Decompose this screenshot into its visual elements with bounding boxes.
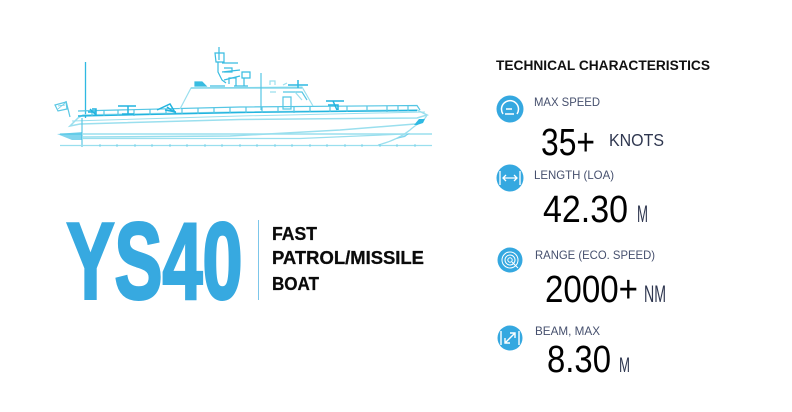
subtitle: FAST: [272, 223, 318, 244]
illustration: ship line drawing: [55, 47, 432, 147]
spec: length: [496, 164, 648, 231]
ship superstructure: [180, 73, 313, 110]
subtitle: PATROL/MISSILE: [272, 247, 424, 268]
icon: length arrows: [496, 164, 524, 192]
title: YS40: YS40: [66, 200, 242, 322]
ship radar tower: [195, 47, 250, 86]
value: 42.30: 42.30: [543, 189, 628, 231]
value: 2000+: 2000+: [545, 269, 638, 311]
unit: knots: KNOTS: [609, 130, 664, 150]
ship flag: [55, 101, 70, 117]
ship filled details: [57, 119, 425, 140]
subtitle: BOAT: [272, 273, 320, 294]
unit: m: M: [637, 201, 648, 228]
label: length: LENGTH (LOA): [534, 168, 614, 182]
ship deck railing: [78, 106, 420, 116]
ship deck guns: [88, 101, 344, 115]
unit: m: M: [619, 354, 630, 377]
heading: technical characteristics: TECHNICAL CHARACTERISTICS: [496, 58, 710, 73]
subtitle: [272, 223, 424, 294]
value: 8.30: 8.30: [547, 339, 611, 381]
value: 35+: 35+: [541, 122, 595, 164]
label: max speed: MAX SPEED: [534, 95, 600, 109]
icon: beam arrows: [498, 326, 522, 350]
spec: max speed: [496, 95, 664, 164]
label: beam: BEAM, MAX: [535, 324, 600, 338]
unit: nm: NM: [644, 281, 666, 308]
ship hull: [60, 110, 432, 147]
icon: radar target: [498, 248, 522, 272]
divider: [258, 220, 259, 300]
ship mast at stern: [84, 62, 86, 118]
label: range: RANGE (ECO. SPEED): [535, 248, 655, 262]
spec: beam: [498, 324, 630, 381]
spec: range: [498, 248, 666, 311]
icon: speedometer: [496, 96, 524, 122]
